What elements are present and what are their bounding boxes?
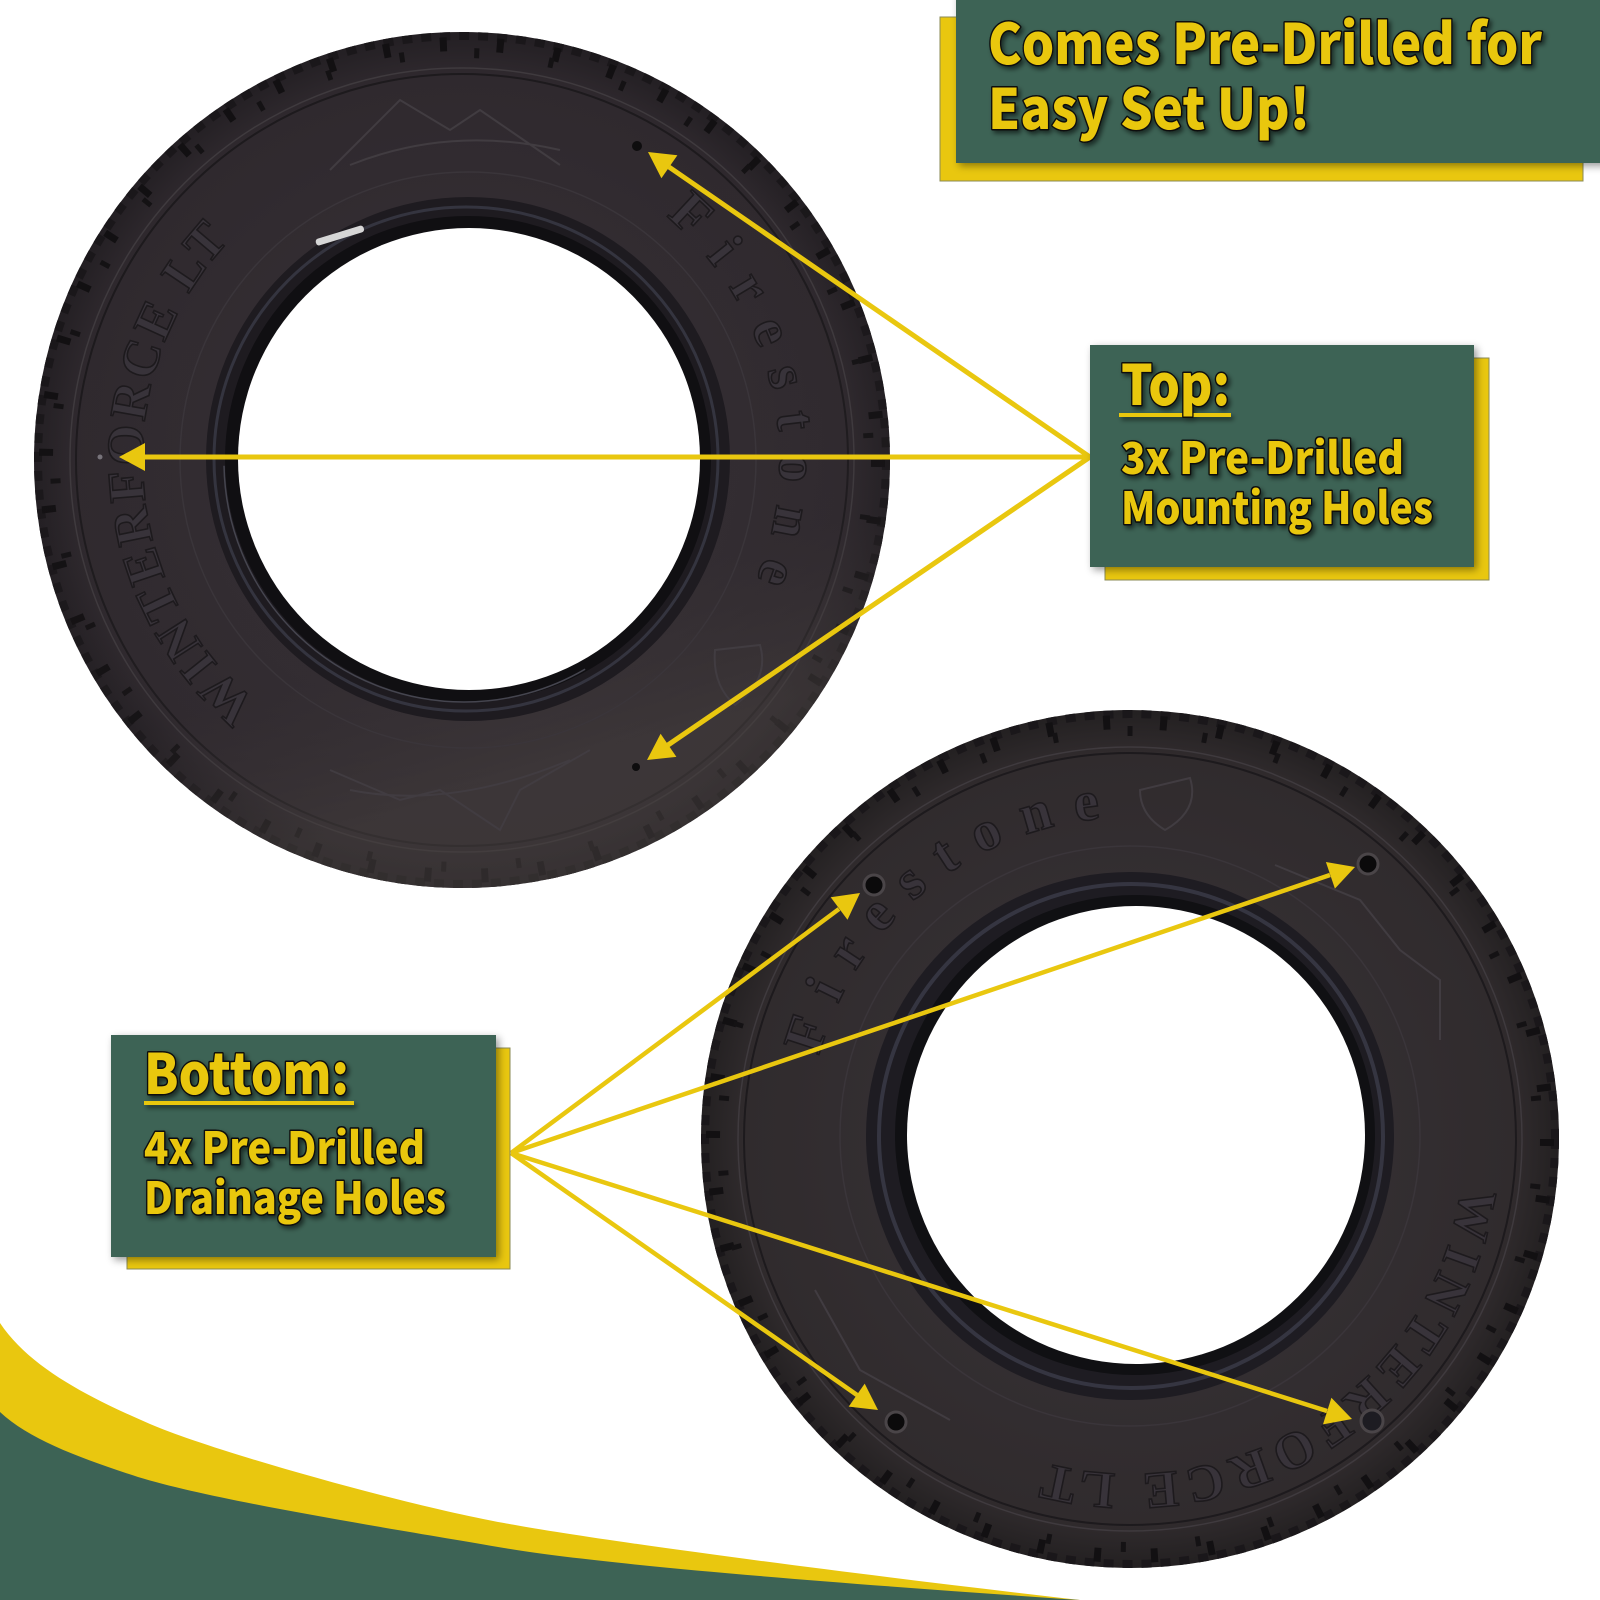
sidewall lettering: Firestone	[783, 792, 1099, 1056]
rotation markings	[330, 100, 590, 830]
sidewall lettering: WINTERFORCE LT	[108, 218, 248, 729]
heading text: Easy Set Up!	[988, 65, 1310, 146]
callout text	[1119, 341, 1433, 537]
callout text: 4x Pre-Drilled	[144, 1113, 425, 1177]
pre-drilled holes	[98, 141, 642, 771]
callout text: Top:	[1121, 341, 1230, 422]
tire: top view: Firestone	[666, 188, 810, 585]
tire logo	[1140, 778, 1192, 830]
tire: top view	[34, 32, 890, 888]
tire: bottom view: WINTERFORCE LT	[1038, 1193, 1497, 1508]
callout text	[144, 1030, 446, 1227]
callout text: Bottom:	[144, 1030, 349, 1111]
panel: bottom callout	[111, 1030, 510, 1269]
arrows: bottom tire	[511, 862, 1355, 1424]
callout text: 3x Pre-Drilled	[1121, 423, 1404, 487]
callout text: Mounting Holes	[1121, 473, 1433, 537]
pre-drilled holes	[864, 854, 1383, 1432]
heading text	[988, 0, 1542, 146]
arrows: top tire	[119, 152, 1090, 760]
panel: heading	[940, 0, 1600, 181]
rotation markings	[815, 865, 1440, 1420]
sticker	[315, 225, 365, 246]
tire logo	[715, 645, 762, 705]
bottom swoosh	[0, 1323, 1080, 1600]
panel: top callout	[1090, 341, 1489, 580]
tire: bottom view	[701, 710, 1559, 1568]
rim	[866, 872, 1394, 1400]
white centre	[238, 228, 700, 690]
heading text: Comes Pre-Drilled for	[988, 0, 1542, 81]
rim	[206, 197, 730, 721]
white centre	[907, 906, 1365, 1364]
callout text: Drainage Holes	[144, 1163, 446, 1227]
